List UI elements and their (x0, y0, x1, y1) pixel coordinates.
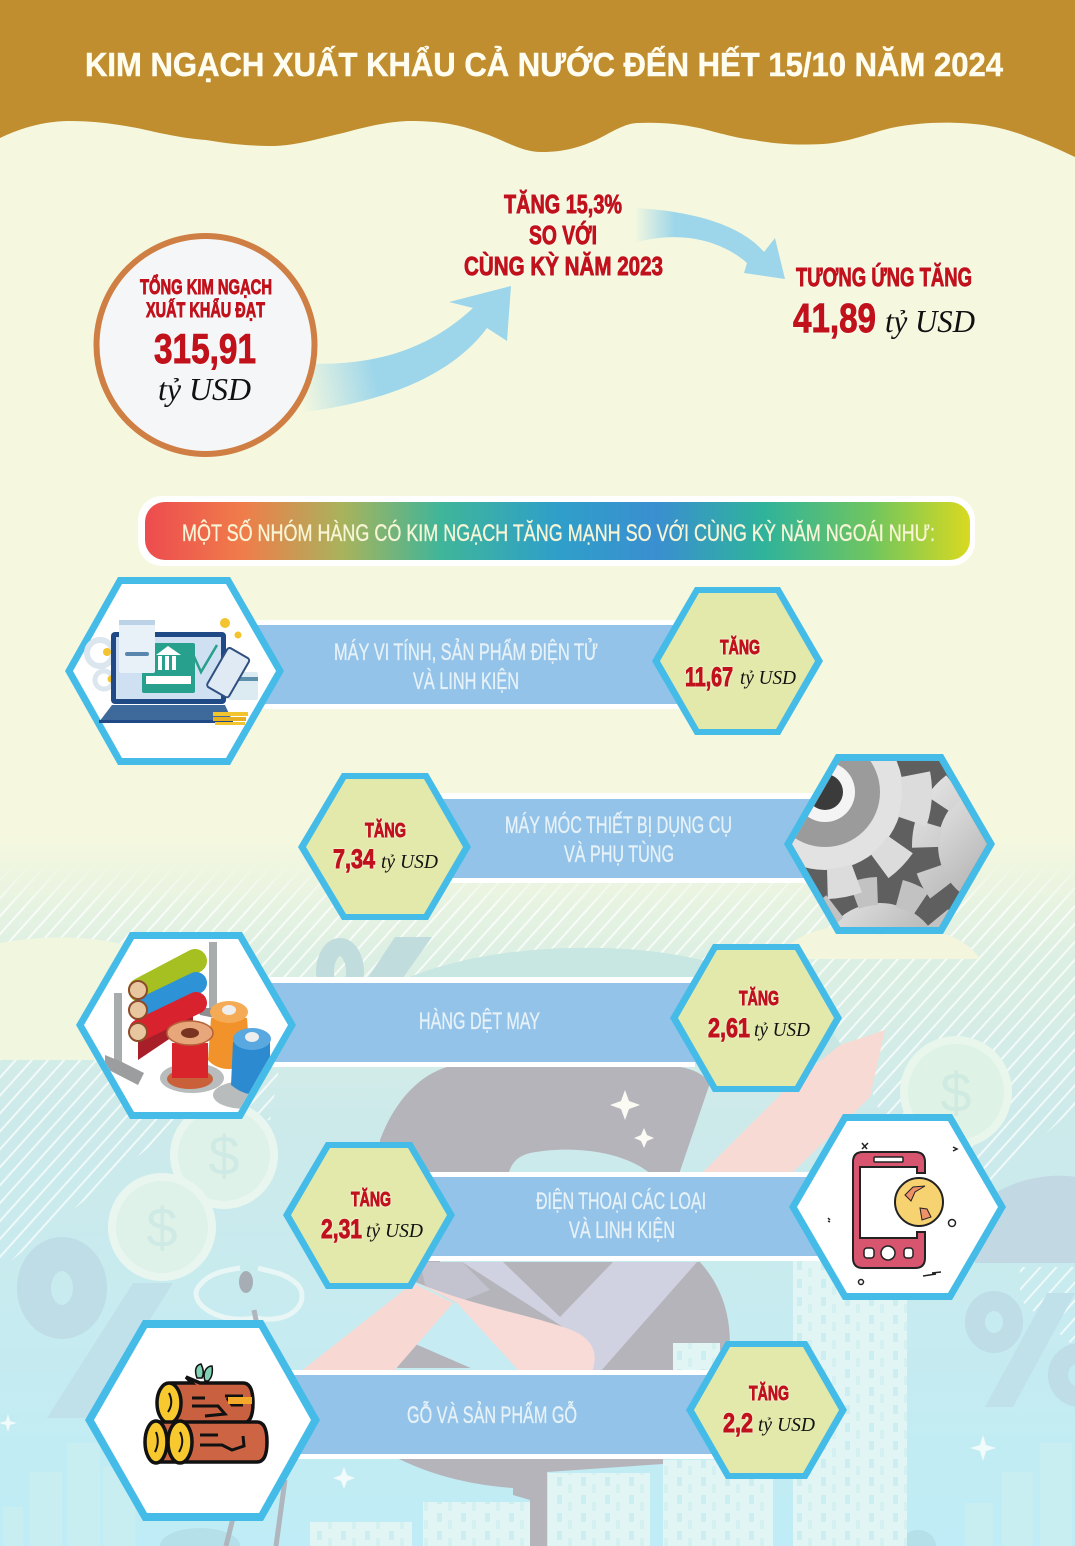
callout: absolute increase: tỷ USD (885, 303, 975, 339)
callout: increase percent (464, 189, 663, 281)
bar: computers label: VÀ LINH KIỆN (413, 668, 519, 695)
row 1: computers and electronics (65, 577, 823, 765)
row 4: phones (283, 1114, 1006, 1300)
hexagon: textiles increase: 2,61 (708, 1013, 750, 1043)
arrow: total to percentage (298, 286, 511, 413)
callout: increase percent: CÙNG KỲ NĂM 2023 (464, 251, 663, 281)
icon: smartphone with globe (789, 1114, 1006, 1300)
icon: stacked wood logs (85, 1320, 320, 1521)
header wave band (0, 0, 1075, 157)
hexagon: textiles increase: TĂNG (739, 987, 779, 1010)
hexagon: computers increase: TĂNG (720, 636, 760, 659)
callout: absolute increase (793, 262, 975, 341)
hexagon: machinery increase (298, 773, 471, 920)
bar: textiles label: HÀNG DỆT MAY (419, 1008, 540, 1035)
hexagon: wood increase (686, 1341, 847, 1479)
hexagon: phones increase: tỷ USD (366, 1220, 424, 1242)
row 3: textiles (76, 932, 842, 1119)
row 2: machinery (298, 754, 995, 934)
rainbow section banner (138, 496, 975, 566)
hexagon: computers increase (652, 587, 823, 735)
bar: machinery label (440, 793, 820, 883)
bar: wood label (290, 1370, 715, 1459)
row 5: wood (85, 1320, 847, 1521)
title: KIM NGẠCH XUẤT KHẨU CẢ NƯỚC ĐẾN HẾT 15/10 NĂM 2024 (85, 46, 1004, 83)
pink growth arrow (300, 1283, 453, 1372)
hexagon: wood increase: tỷ USD (758, 1414, 816, 1436)
circle: total export value: XUẤT KHẨU ĐẠT (146, 299, 265, 322)
hexagon: textiles increase (670, 944, 842, 1092)
icon: laptop with payment screens (65, 577, 284, 765)
icon: fabric rolls and thread spools (76, 932, 296, 1119)
bar: computers label: MÁY VI TÍNH, SẢN PHẨM ĐIỆN TỬ (334, 637, 598, 666)
icon: steel gears (784, 754, 995, 934)
hexagon: textiles increase: tỷ USD (754, 1019, 811, 1041)
percent shapes (34, 1254, 90, 1322)
circle: total export value: TỔNG KIM NGẠCH (140, 275, 272, 299)
bar: phones label: ĐIỆN THOẠI CÁC LOẠI (536, 1188, 706, 1215)
background illustration: clouds, dollar, arrow, coins: $ (940, 1061, 972, 1124)
hexagon: phones increase (283, 1142, 455, 1289)
hexagon: computers increase: 11,67 (685, 662, 733, 692)
bar: phones label (425, 1172, 820, 1261)
hexagon: computers increase: tỷ USD (740, 667, 797, 689)
hexagon: phones increase: 2,31 (321, 1214, 362, 1244)
small figure (196, 1268, 302, 1319)
callout: increase percent: TĂNG 15,3% (504, 189, 622, 219)
coins (174, 1105, 274, 1205)
background illustration: clouds, dollar, arrow, coins: $ (146, 1196, 178, 1259)
bar: phones label: VÀ LINH KIỆN (569, 1217, 675, 1244)
circle: total export value: 315,91 (154, 325, 256, 372)
hexagon: wood increase: 2,2 (723, 1408, 753, 1438)
callout: absolute increase: TƯƠNG ỨNG TĂNG (796, 262, 972, 292)
bar: machinery label: VÀ PHỤ TÙNG (564, 841, 674, 868)
hexagon: machinery increase: tỷ USD (381, 851, 439, 873)
arrow: percentage to absolute increase (634, 208, 785, 279)
callout: absolute increase: 41,89 (793, 295, 876, 341)
callout: increase percent: SO VỚI (529, 220, 597, 250)
background illustration: clouds, dollar, arrow, coins: $ (208, 1124, 240, 1187)
hexagon: machinery increase: TĂNG (365, 819, 406, 842)
circle: total export value (96, 236, 314, 454)
background illustration: clouds, dollar, arrow, coins (0, 860, 1075, 1546)
coin towers (793, 1260, 907, 1546)
sparkles (610, 1090, 640, 1120)
circle: total export value: tỷ USD (158, 371, 251, 407)
bar: machinery label: MÁY MÓC THIẾT BỊ DỤNG CỤ (505, 811, 732, 839)
bar: textiles label (265, 977, 695, 1067)
hexagon: wood increase: TĂNG (749, 1382, 789, 1405)
bar: computers label (255, 620, 685, 709)
dollar sign body (380, 1067, 710, 1262)
hexagon: phones increase: TĂNG (351, 1188, 391, 1211)
bar: wood label: GỖ VÀ SẢN PHẨM GỖ (407, 1400, 577, 1429)
hexagon: machinery increase: 7,34 (333, 844, 375, 874)
